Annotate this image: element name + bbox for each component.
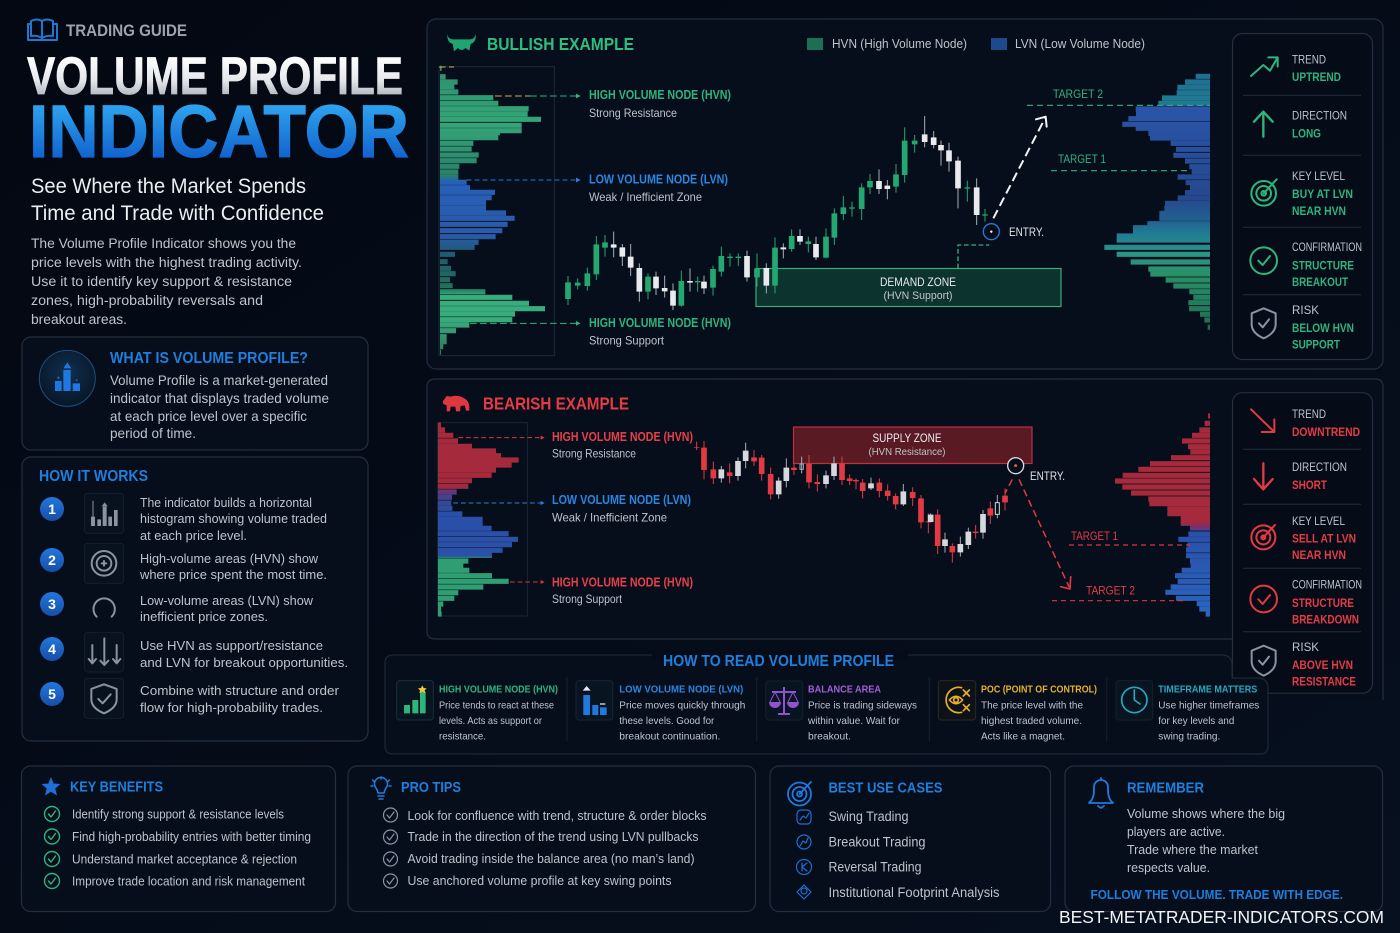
icon: bear — [443, 396, 469, 411]
side card: bullish checklist — [1232, 34, 1372, 360]
item: risk: RISK — [1292, 303, 1319, 317]
icon: bull — [447, 34, 476, 51]
icon: balance scale — [766, 681, 803, 720]
item: trend: UPTREND — [1292, 70, 1341, 84]
checklist: Improve trade location and risk management — [72, 874, 305, 888]
item: lvn — [576, 681, 745, 742]
icon: volume bars in circle — [39, 350, 95, 406]
panel: pro tips — [348, 766, 756, 912]
step 3: Low-volume areas (LVN) show — [140, 593, 314, 608]
body text — [110, 372, 329, 441]
label: lvn: LOW VOLUME NODE (LVN) — [552, 493, 691, 507]
volume profile: left histogram — [439, 67, 581, 356]
candlestick chart: bullish — [568, 116, 985, 310]
item: direction — [1254, 108, 1347, 140]
entry marker — [958, 224, 1044, 268]
item: balance area — [766, 681, 917, 742]
heading: WHAT IS VOLUME PROFILE? — [110, 350, 308, 367]
item: trend: DOWNTREND — [1292, 425, 1360, 439]
label: hvn resistance: HIGH VOLUME NODE (HVN) — [589, 88, 731, 102]
item: direction — [1254, 460, 1347, 492]
heading: HOW TO READ VOLUME PROFILE — [663, 653, 894, 670]
step 1: histogram showing volume traded — [140, 511, 327, 526]
step 1: 1 — [48, 501, 56, 517]
label: trading guide: TRADING GUIDE — [66, 21, 187, 40]
item: key level — [1251, 169, 1353, 218]
item: balance area: BALANCE AREA — [808, 684, 881, 696]
label: hvn support: HIGH VOLUME NODE (HVN) — [589, 316, 731, 330]
supply zone: (HVN Resistance) — [868, 446, 946, 458]
checklist — [384, 808, 706, 888]
label: hvn resistance: HIGH VOLUME NODE (HVN) — [552, 430, 693, 444]
use case list — [796, 809, 1000, 900]
header: trading guide — [28, 20, 187, 40]
body text: Trade where the market — [1127, 842, 1258, 857]
label: hvn support: Strong Support — [589, 334, 665, 348]
icon: open book — [28, 20, 57, 40]
item: confirmation: BREAKDOWN — [1292, 612, 1359, 626]
item: trend — [1251, 407, 1360, 439]
item: direction: LONG — [1292, 126, 1321, 140]
step 4 — [40, 633, 348, 672]
step 1: at each price level. — [140, 528, 247, 543]
item: lvn: breakout continuation. — [619, 730, 720, 742]
item: confirmation: CONFIRMATION — [1292, 578, 1362, 592]
panel: key benefits — [22, 766, 336, 912]
use case list: Swing Trading — [828, 809, 908, 824]
item: poc: The price level with the — [981, 700, 1083, 712]
item: direction: DIRECTION — [1292, 108, 1347, 122]
use case list: Reversal Trading — [828, 860, 922, 874]
arrow: bullish trade path — [993, 117, 1047, 218]
supply zone — [794, 427, 1032, 464]
checklist: Understand market acceptance & rejection — [72, 852, 297, 866]
side card: bearish checklist — [1232, 393, 1372, 693]
step 2: 2 — [48, 552, 56, 568]
item: poc: highest traded volume. — [981, 715, 1082, 727]
item: timeframe — [1116, 681, 1259, 742]
item: risk: RISK — [1292, 640, 1319, 654]
icon: point of control — [938, 681, 976, 720]
intro paragraph — [31, 236, 302, 328]
intro paragraph: zones, high-probability reversals and — [31, 293, 263, 309]
step 5: flow for high-probability trades. — [140, 700, 323, 715]
label: hvn support — [589, 316, 731, 348]
item: balance area: within value. Wait for — [807, 715, 900, 727]
icon: target — [788, 782, 811, 806]
checklist — [44, 806, 311, 888]
legend — [807, 37, 1145, 51]
item: key level: SELL AT LVN — [1292, 532, 1356, 546]
intro paragraph: The Volume Profile Indicator shows you the — [31, 236, 296, 252]
item: timeframe: Use higher timeframes — [1158, 700, 1259, 712]
arrow: bearish trade path — [1005, 479, 1071, 589]
item: confirmation: STRUCTURE — [1292, 258, 1354, 272]
panel: what is volume profile — [22, 337, 368, 450]
use case list: Institutional Footprint Analysis — [828, 885, 1000, 900]
step 4: Use HVN as support/resistance — [140, 638, 323, 653]
item: risk: RESISTANCE — [1292, 674, 1356, 688]
intro paragraph: Use it to identify key support & resistance — [31, 274, 292, 290]
checklist: Avoid trading inside the balance area (no man’s land) — [408, 851, 694, 866]
title line 1: VOLUME PROFILE — [27, 47, 403, 106]
item: balance area: breakout. — [808, 730, 851, 742]
item: balance area: Price is trading sideways — [808, 700, 917, 712]
icon: light bulb — [371, 777, 391, 799]
checklist: Use anchored volume profile at key swing points — [408, 873, 672, 888]
heading: HOW IT WORKS — [39, 468, 148, 485]
step 3: inefficient price zones. — [140, 609, 268, 624]
item: key level: KEY LEVEL — [1292, 169, 1345, 183]
volume profile: left histogram — [437, 423, 545, 616]
target 2: TARGET 2 — [1086, 584, 1135, 598]
label: lvn: Weak / Inefficient Zone — [552, 510, 667, 524]
step 2: where price spent the most time. — [139, 567, 327, 582]
intro paragraph: price levels with the highest trading activity. — [31, 255, 302, 271]
heading: BULLISH EXAMPLE — [487, 34, 634, 54]
heading: KEY BENEFITS — [70, 780, 163, 796]
label: hvn resistance — [589, 88, 731, 120]
item: hvn: levels. Acts as support or — [439, 715, 542, 727]
icon: star — [42, 777, 60, 796]
panel: best use cases — [770, 766, 1050, 912]
item: poc: Acts like a magnet. — [981, 730, 1065, 742]
panel: how to read volume profile — [385, 650, 1268, 754]
item: risk: SUPPORT — [1292, 338, 1341, 352]
body text: players are active. — [1127, 824, 1225, 839]
body text: indicator that displays traded volume — [110, 390, 329, 406]
body text — [1127, 806, 1285, 875]
label: hvn support: HIGH VOLUME NODE (HVN) — [552, 576, 693, 590]
heading: REMEMBER — [1127, 780, 1204, 796]
label: hvn resistance: Strong Resistance — [589, 106, 677, 120]
checklist: Look for confluence with trend, structure & order blocks — [408, 808, 706, 823]
target 1: TARGET 1 — [1071, 529, 1118, 543]
item: timeframe: for key levels and — [1158, 715, 1234, 727]
subtitle: Time and Trade with Confidence — [31, 202, 324, 225]
body text: respects value. — [1127, 860, 1210, 875]
intro paragraph: breakout areas. — [31, 312, 127, 328]
item: timeframe: swing trading. — [1158, 730, 1220, 742]
title — [27, 47, 409, 173]
item: lvn: Price moves quickly through — [619, 700, 745, 712]
item: risk — [1252, 303, 1354, 352]
use case list: Breakout Trading — [828, 834, 926, 850]
label: lvn — [552, 493, 691, 524]
target 2: TARGET 2 — [1053, 87, 1103, 101]
item: trend: TREND — [1292, 407, 1326, 421]
item: key level — [1251, 514, 1356, 562]
item: trend: TREND — [1292, 52, 1326, 66]
demand zone: DEMAND ZONE — [880, 277, 956, 289]
item: hvn — [397, 681, 558, 742]
item: hvn: Price tends to react at these — [439, 700, 554, 712]
step 5: Combine with structure and order — [140, 683, 340, 698]
candlestick chart: bearish — [697, 441, 1005, 563]
body text: at each price level over a specific — [110, 408, 307, 424]
step 3: 3 — [48, 596, 56, 612]
item: key level: NEAR HVN — [1292, 204, 1346, 218]
item: risk: ABOVE HVN — [1292, 658, 1353, 672]
item: key level: BUY AT LVN — [1292, 187, 1353, 201]
item: trend — [1251, 52, 1341, 84]
item: risk — [1252, 640, 1356, 688]
panel: remember — [1065, 766, 1382, 912]
panel: bearish example — [427, 379, 1383, 700]
item: key level: NEAR HVN — [1292, 548, 1346, 562]
step 5 — [40, 678, 340, 718]
step 1 — [40, 493, 327, 543]
icon: bell — [1089, 778, 1113, 808]
checklist: Identify strong support & resistance levels — [72, 808, 284, 822]
icon: green bars — [397, 681, 433, 720]
item: timeframe: TIMEFRAME MATTERS — [1158, 684, 1257, 696]
step 4: 4 — [48, 641, 56, 657]
subtitle: See Where the Market Spends — [31, 175, 306, 198]
entry marker: ENTRY. — [1009, 225, 1044, 239]
item: direction: SHORT — [1292, 478, 1328, 492]
body text: period of time. — [110, 425, 196, 441]
icon: blue bars — [576, 681, 613, 720]
icon: clock — [1116, 681, 1153, 720]
item: confirmation — [1250, 578, 1362, 626]
item: confirmation: BREAKOUT — [1292, 275, 1349, 289]
item: risk: BELOW HVN — [1292, 321, 1354, 335]
item: confirmation: STRUCTURE — [1292, 596, 1354, 610]
label: lvn: LOW VOLUME NODE (LVN) — [589, 172, 728, 186]
item: poc — [938, 681, 1097, 742]
panel: how it works — [22, 457, 368, 741]
demand zone: (HVN Support) — [884, 290, 952, 302]
volume profile: right histogram — [1104, 76, 1210, 327]
target 2 — [1052, 584, 1183, 601]
call to action: FOLLOW THE VOLUME. TRADE WITH EDGE. — [1090, 887, 1343, 902]
watermark: BEST-METATRADER-INDICATORS.COM — [1059, 907, 1384, 927]
target 1 — [1051, 152, 1190, 171]
demand zone — [756, 268, 1061, 306]
item: lvn: LOW VOLUME NODE (LVN) — [619, 684, 743, 696]
step 2 — [40, 543, 327, 583]
entry marker — [1008, 458, 1065, 483]
legend: LVN (Low Volume Node) — [1015, 37, 1145, 51]
item: poc: POC (POINT OF CONTROL) — [981, 684, 1097, 696]
item: key level: KEY LEVEL — [1292, 514, 1345, 528]
label: hvn resistance: Strong Resistance — [552, 446, 636, 460]
supply zone: SUPPLY ZONE — [872, 433, 942, 445]
body text: Volume shows where the big — [1127, 806, 1285, 821]
body text: Volume Profile is a market-generated — [110, 372, 328, 388]
label: lvn — [589, 172, 728, 204]
step 4: and LVN for breakout opportunities. — [140, 655, 348, 670]
heading: BEST USE CASES — [828, 780, 943, 796]
step 3 — [40, 592, 314, 624]
item: confirmation: CONFIRMATION — [1292, 240, 1362, 254]
item: direction: DIRECTION — [1292, 460, 1347, 474]
heading: PRO TIPS — [401, 780, 461, 796]
item: hvn: HIGH VOLUME NODE (HVN) — [439, 684, 558, 696]
volume profile: right histogram — [1115, 416, 1210, 614]
label: hvn support: Strong Support — [552, 592, 623, 606]
item: hvn: resistance. — [439, 730, 486, 742]
entry marker: ENTRY. — [1030, 469, 1065, 483]
item: lvn: these levels. Good for — [619, 715, 715, 727]
label: hvn resistance — [552, 430, 693, 460]
panel: bullish example — [427, 19, 1383, 369]
label: lvn: Weak / Inefficient Zone — [589, 190, 702, 204]
target 1: TARGET 1 — [1058, 152, 1106, 166]
step 2: High-volume areas (HVN) show — [140, 551, 319, 566]
subtitle — [31, 175, 324, 225]
label: hvn support — [552, 576, 693, 606]
step 1: The indicator builds a horizontal — [140, 495, 312, 510]
checklist: Find high-probability entries with better timing — [72, 830, 311, 844]
legend: HVN (High Volume Node) — [832, 37, 967, 51]
step 5: 5 — [48, 686, 56, 702]
item: confirmation — [1250, 240, 1362, 289]
target 1 — [1069, 529, 1190, 545]
heading: BEARISH EXAMPLE — [483, 394, 629, 414]
checklist: Trade in the direction of the trend using LVN pullbacks — [408, 829, 698, 844]
title line 2: INDICATOR — [29, 90, 409, 173]
